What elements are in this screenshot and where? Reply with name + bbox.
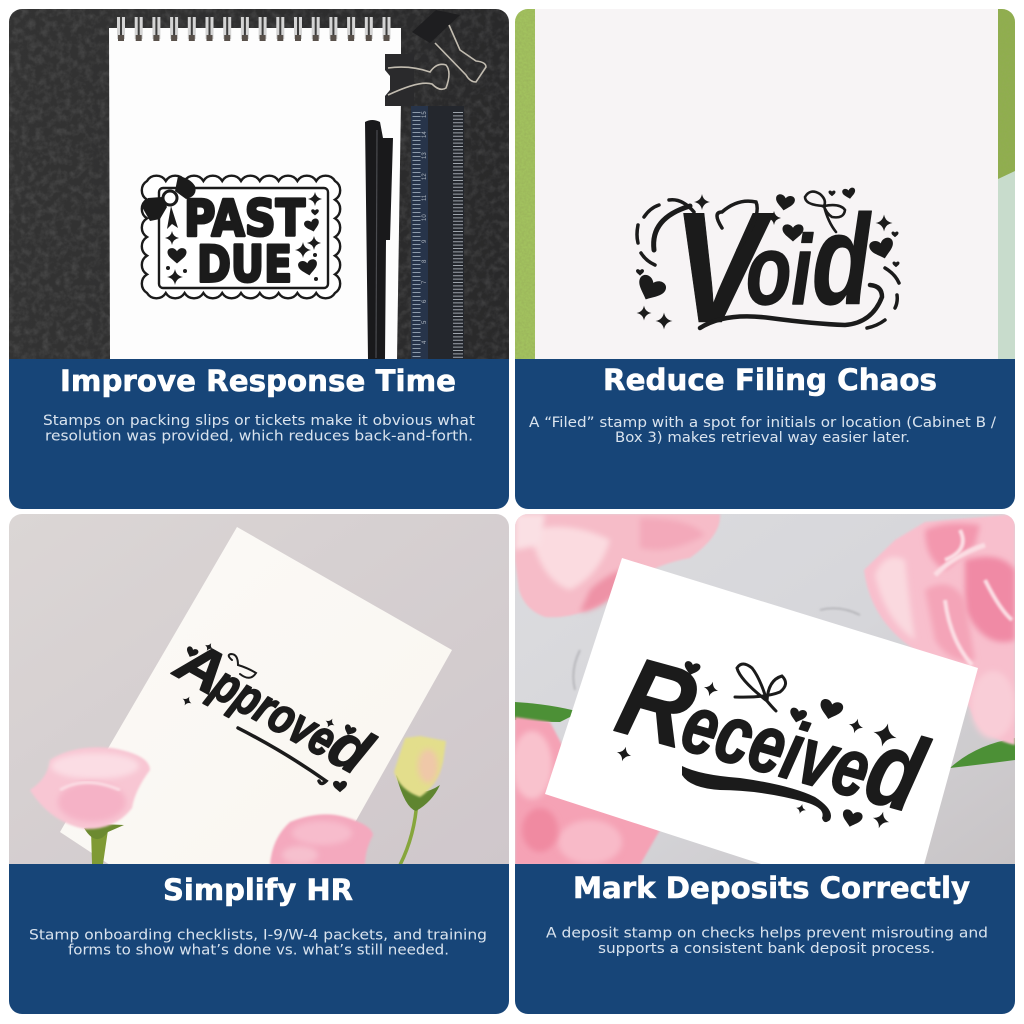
stamp: Past Due: PAST xyxy=(184,190,305,248)
description: A deposit stamp on checks helps prevent misrouting and xyxy=(546,926,988,942)
description: resolution was provided, which reduces back-and-forth. xyxy=(45,428,473,444)
description: Box 3) makes retrieval way easier later. xyxy=(615,430,910,446)
ruler: 11 xyxy=(422,194,428,201)
description xyxy=(529,415,996,446)
heading: Reduce Filing Chaos xyxy=(603,363,937,397)
ruler: 6 xyxy=(422,299,428,303)
panel: mark deposits correctly xyxy=(512,514,1015,1014)
ruler: 13 xyxy=(422,152,428,159)
ruler xyxy=(411,106,464,360)
panel: simplify HR xyxy=(9,514,509,1014)
description: forms to show what’s done vs. what’s still needed. xyxy=(68,942,449,958)
ruler: 5 xyxy=(422,320,428,324)
ruler: 8 xyxy=(422,259,428,263)
photo: card with peonies on marble xyxy=(512,514,1015,865)
stamp: Void: V xyxy=(672,180,774,356)
description xyxy=(43,413,475,444)
pen xyxy=(365,120,393,359)
stamp: Received: eceive xyxy=(673,678,880,816)
description xyxy=(29,928,487,958)
binder clips xyxy=(385,10,486,106)
ruler: 12 xyxy=(422,173,428,180)
panel: reduce filing chaos xyxy=(515,9,1015,509)
caption band xyxy=(515,359,1015,509)
stamp: Approved: pprove xyxy=(202,654,346,768)
ruler: 4 xyxy=(422,340,428,344)
caption band xyxy=(9,359,509,509)
pink rose bottom xyxy=(270,814,373,865)
description: A “Filed” stamp with a spot for initials or location (Cabinet B / xyxy=(529,415,996,431)
paper card xyxy=(60,527,452,865)
yellow rose xyxy=(394,736,446,865)
marble vein xyxy=(573,608,860,690)
notepad page xyxy=(109,28,401,359)
peony bottom left xyxy=(512,717,660,865)
spiral binding xyxy=(117,27,394,38)
ruler: 7 xyxy=(422,280,428,284)
stamp: Void: d xyxy=(812,189,872,332)
ruler: 15 xyxy=(422,111,428,118)
photo: white card on green xyxy=(515,9,1015,360)
caption band xyxy=(9,864,509,1014)
peony top left xyxy=(515,514,720,617)
description: Stamp onboarding checklists, I-9/W-4 packets, and training xyxy=(29,928,487,944)
ruler: 10 xyxy=(422,214,428,221)
stamp: Past Due xyxy=(142,176,340,298)
heading: Simplify HR xyxy=(163,873,353,907)
ruler: 9 xyxy=(422,239,428,243)
photo: card with pink roses xyxy=(9,514,509,865)
heading: Mark Deposits Correctly xyxy=(573,871,970,905)
heading: Improve Response Time xyxy=(60,364,456,398)
stamp: Void: oi xyxy=(746,215,813,325)
peony right xyxy=(864,514,1015,745)
panel: improve response time xyxy=(9,9,509,509)
stamp: Received: R xyxy=(606,633,708,772)
paper card xyxy=(545,558,978,865)
stamp: Past Due: DUE xyxy=(197,236,292,294)
ruler: 14 xyxy=(422,131,428,138)
description xyxy=(546,926,988,957)
description: supports a consistent bank deposit process. xyxy=(598,941,935,957)
leaves xyxy=(515,702,1015,768)
stamp: Received: d xyxy=(854,707,938,835)
pink rose left xyxy=(30,747,150,864)
stamp: Received xyxy=(613,659,934,828)
photo: notepad on dark slate xyxy=(9,9,509,360)
stamp: Void xyxy=(635,188,901,330)
stamp: Approved: d xyxy=(317,710,383,789)
description: Stamps on packing slips or tickets make it obvious what xyxy=(43,413,475,429)
caption band xyxy=(515,864,1015,1014)
stamp: Approved: A xyxy=(164,626,238,708)
